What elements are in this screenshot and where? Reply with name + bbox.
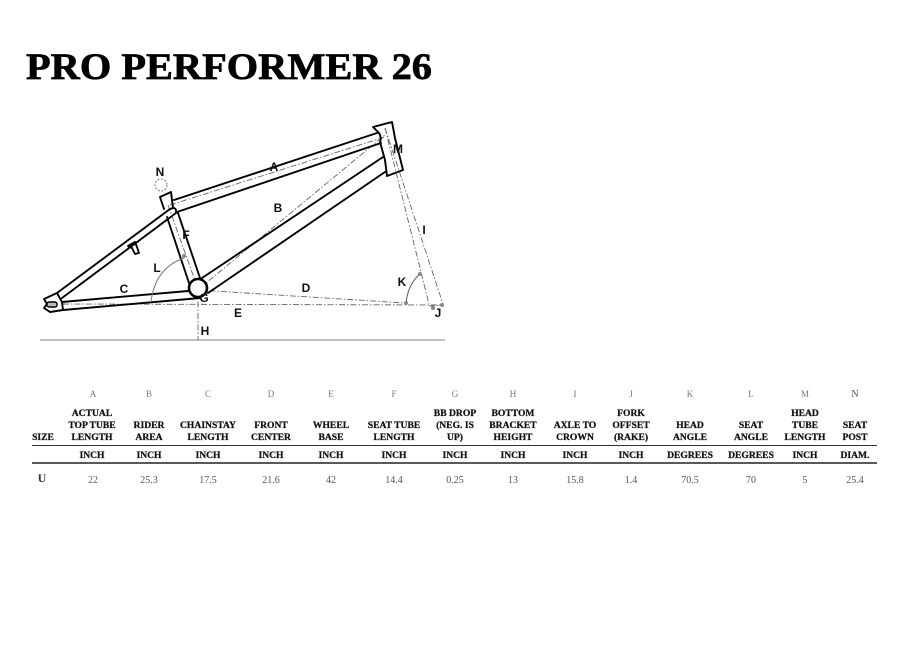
units row: INCH	[136, 450, 162, 461]
column headings: SEAT TUBE	[368, 420, 420, 431]
units row: INCH	[195, 450, 221, 461]
column headings: ANGLE	[673, 432, 707, 443]
column headings: LENGTH	[187, 432, 229, 443]
brake bridge tab	[128, 242, 139, 254]
column headings: FORK	[617, 408, 645, 419]
dimension letters: J	[435, 306, 441, 320]
column letters: D	[268, 389, 275, 399]
units row: INCH	[381, 450, 407, 461]
values row: 21.6	[262, 475, 280, 486]
column headings: AREA	[135, 432, 163, 443]
column letters: J	[629, 389, 633, 399]
column headings: BB DROP	[434, 408, 476, 419]
column headings: AXLE TO	[554, 420, 596, 431]
values row: 25.3	[140, 475, 158, 486]
units row: INCH	[318, 450, 344, 461]
ground line	[40, 339, 445, 341]
seat tube top	[160, 192, 173, 209]
title: PRO PERFORMER 26	[26, 47, 432, 88]
bottom bracket	[189, 279, 207, 297]
values row: 14.4	[385, 475, 403, 486]
column headings: SEAT	[843, 420, 868, 431]
seat angle arc	[151, 258, 184, 302]
units row: INCH	[792, 450, 818, 461]
dimension letters: M	[393, 142, 403, 156]
column headings: HEAD	[791, 408, 819, 419]
dimension letters: G	[199, 291, 209, 305]
column letters: B	[146, 389, 152, 399]
column letters: K	[687, 389, 694, 399]
values row: 70	[746, 475, 756, 486]
dimension letters: N	[156, 165, 164, 179]
values row: U	[38, 471, 47, 485]
units row: INCH	[500, 450, 526, 461]
column headings: TOP TUBE	[68, 420, 116, 431]
values row: 25.4	[846, 475, 864, 486]
dimension letters: K	[398, 275, 407, 289]
column headings: (NEG. IS	[436, 420, 474, 431]
column headings	[32, 408, 868, 443]
fork dimension lines	[385, 128, 443, 304]
dimension letters: F	[182, 228, 190, 242]
seat tube	[167, 213, 200, 283]
units row: INCH	[562, 450, 588, 461]
column headings: WHEEL	[313, 420, 349, 431]
column headings: BOTTOM	[491, 408, 535, 419]
column headings: HEIGHT	[494, 432, 533, 443]
dimension letters: A	[270, 160, 279, 174]
values row: 13	[508, 475, 518, 486]
column letters: G	[452, 389, 459, 399]
units row: DEGREES	[667, 450, 713, 461]
chain stay	[62, 291, 200, 310]
column headings: SIZE	[32, 432, 54, 443]
geometry table	[32, 389, 877, 486]
values row: 42	[326, 475, 336, 486]
geometry dimension lines	[63, 135, 443, 340]
column letters	[90, 389, 859, 400]
dimension letters: D	[302, 281, 311, 295]
column letters: L	[748, 389, 754, 399]
column headings: LENGTH	[784, 432, 826, 443]
units row: INCH	[442, 450, 468, 461]
column headings: RIDER	[134, 420, 166, 431]
units row: INCH	[79, 450, 105, 461]
dimension letters: C	[120, 282, 129, 296]
column headings: ACTUAL	[72, 408, 112, 419]
values row: 15.8	[566, 475, 584, 486]
values row	[38, 471, 864, 486]
column headings: HEAD	[676, 420, 704, 431]
units row: INCH	[258, 450, 284, 461]
top tube	[174, 133, 381, 212]
seat post circle	[155, 179, 167, 191]
column headings: CENTER	[251, 432, 292, 443]
values row: 70.5	[681, 475, 699, 486]
values row: 0.25	[446, 475, 464, 486]
column headings: BASE	[318, 432, 344, 443]
units row: DIAM.	[840, 450, 870, 461]
seat stay	[57, 208, 176, 298]
values row: 17.5	[199, 475, 217, 486]
column headings: BRACKET	[489, 420, 537, 431]
column headings: LENGTH	[71, 432, 113, 443]
dropout slot	[47, 302, 57, 307]
dimension letters: B	[274, 201, 283, 215]
units row: DEGREES	[728, 450, 774, 461]
column letters: N	[851, 389, 859, 400]
column headings: ANGLE	[734, 432, 768, 443]
column headings: UP)	[447, 432, 463, 443]
column headings: CHAINSTAY	[180, 420, 236, 431]
column letters: C	[205, 389, 211, 399]
column letters: E	[328, 389, 334, 399]
column headings: CROWN	[556, 432, 594, 443]
dimension letters: E	[234, 306, 242, 320]
down tube	[202, 157, 385, 293]
column letters: F	[391, 389, 397, 399]
bike frame geometry diagram	[40, 122, 445, 340]
column headings: LENGTH	[373, 432, 415, 443]
values row: 1.4	[625, 475, 637, 486]
head angle arc	[406, 274, 420, 303]
units row	[79, 450, 870, 461]
column letters: H	[510, 389, 517, 399]
column headings: OFFSET	[612, 420, 650, 431]
column letters: A	[90, 389, 97, 399]
column headings: (RAKE)	[614, 432, 648, 443]
units row: INCH	[618, 450, 644, 461]
column letters: M	[801, 389, 809, 399]
angle markers	[182, 254, 444, 310]
values row: 5	[802, 475, 808, 486]
dimension letters: L	[153, 261, 161, 275]
column headings: FRONT	[254, 420, 288, 431]
head tube	[373, 122, 403, 176]
dimension letters: H	[201, 324, 209, 338]
column headings: POST	[842, 432, 868, 443]
dimension letters	[120, 142, 441, 338]
column letters: I	[574, 389, 576, 399]
dimension letters: I	[422, 223, 426, 237]
column headings: SEAT	[739, 420, 764, 431]
rear dropout	[44, 293, 63, 312]
column headings: TUBE	[792, 420, 818, 431]
values row: 22	[88, 475, 98, 486]
